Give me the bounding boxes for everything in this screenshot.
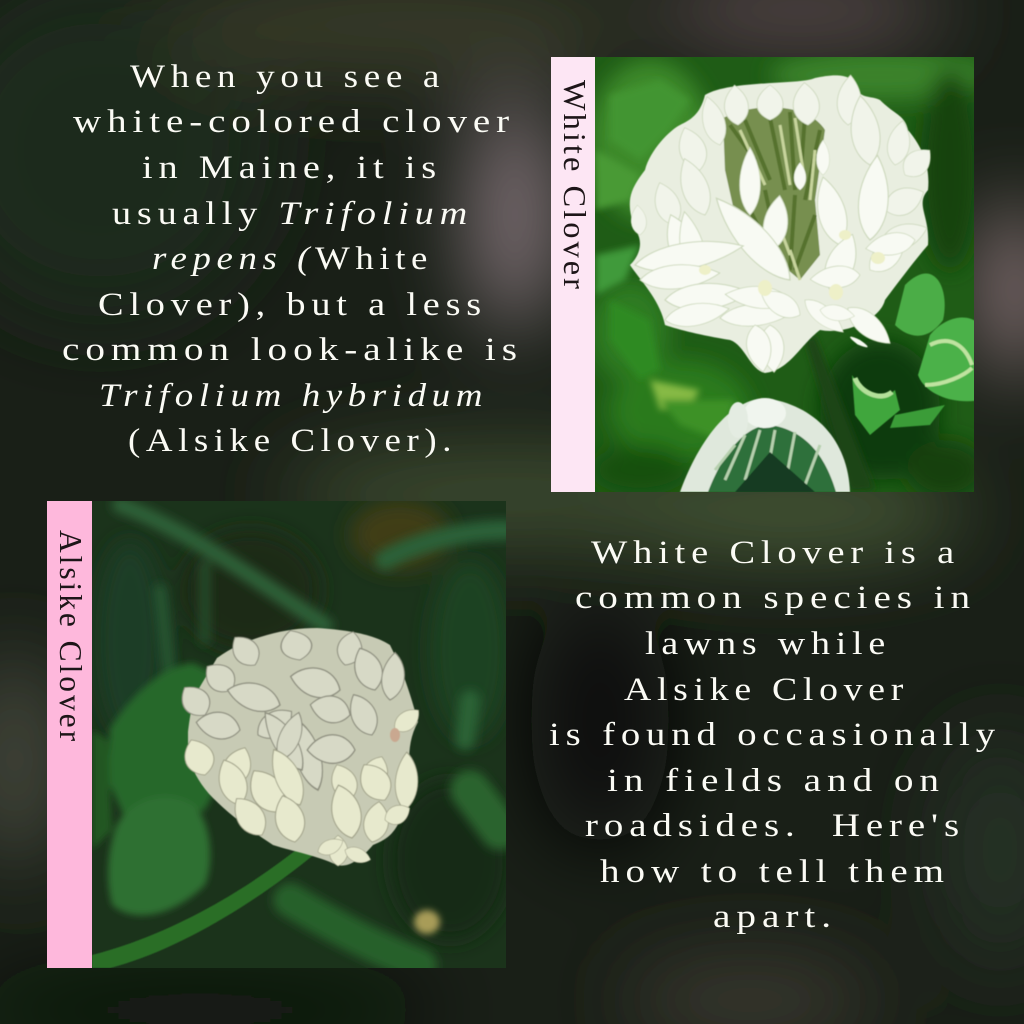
text block: habitat: is found occasionally bbox=[549, 717, 1001, 753]
text block: habitat: common species in bbox=[575, 580, 976, 616]
leaves bbox=[92, 663, 440, 934]
leaflets left bbox=[610, 83, 688, 156]
text block: habitat: White Clover is a bbox=[591, 535, 960, 571]
photo: white clover bbox=[590, 50, 990, 500]
text block: intro: white-colored clover bbox=[73, 104, 515, 140]
flower head bbox=[176, 627, 425, 867]
stem bbox=[805, 335, 875, 492]
text block: intro: Trifolium hybridum bbox=[99, 378, 488, 414]
text block: habitat: how to tell them bbox=[600, 854, 950, 890]
text block: habitat: lawns while bbox=[645, 626, 891, 662]
clover leaves right bbox=[895, 274, 945, 336]
label bar: Alsike Clover bbox=[47, 501, 92, 968]
text block: habitat: in fields and on bbox=[607, 763, 945, 799]
text block: intro: repens ( White bbox=[152, 241, 433, 277]
stem bbox=[92, 851, 312, 968]
text block: intro: in Maine, it is bbox=[142, 150, 442, 186]
bud bbox=[680, 398, 850, 492]
text block: habitat bbox=[549, 535, 1001, 935]
text block: intro: (Alsike Clover). bbox=[128, 423, 457, 459]
front petals bbox=[633, 140, 917, 374]
text block: intro: common look-alike is bbox=[62, 332, 523, 368]
text block: habitat: roadsides. Here's bbox=[585, 808, 965, 844]
flower head bbox=[630, 74, 938, 374]
green centre bbox=[723, 107, 825, 280]
petals behind centre bbox=[630, 74, 938, 256]
label bar: White Clover: White Clover bbox=[557, 80, 593, 292]
blurred background foliage bbox=[95, 500, 510, 940]
label bar: Alsike Clover: Alsike Clover bbox=[53, 530, 89, 744]
text block: habitat: apart. bbox=[713, 899, 837, 935]
text block: intro: usually Trifolium bbox=[112, 196, 473, 232]
text block: intro: When you see a bbox=[130, 59, 445, 95]
label bar: White Clover bbox=[551, 57, 595, 492]
photo: alsike clover bbox=[92, 500, 510, 968]
foliage bbox=[590, 50, 990, 500]
text block: intro: Clover), but a less bbox=[98, 287, 487, 323]
text block: intro bbox=[62, 59, 523, 459]
text block: habitat: Alsike Clover bbox=[624, 672, 909, 708]
